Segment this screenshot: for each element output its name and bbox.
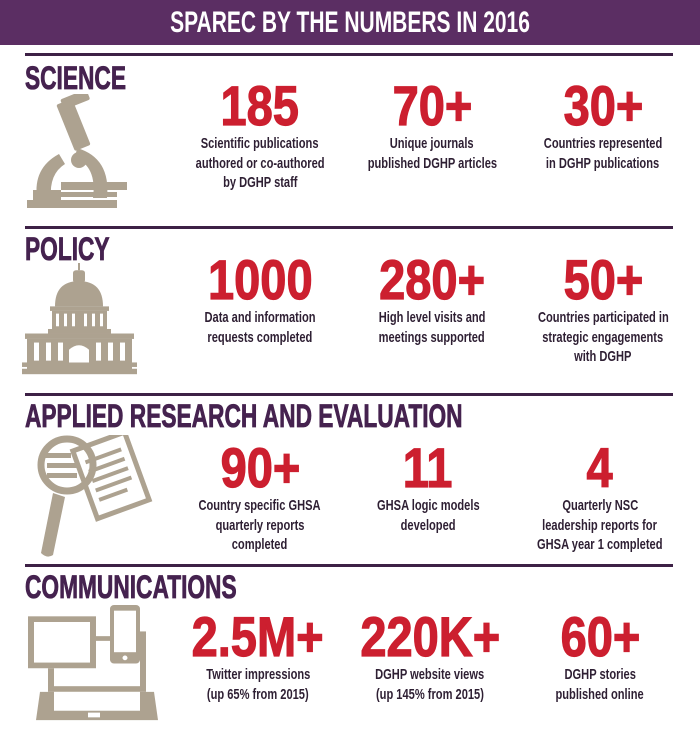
stat: 4: [537, 436, 663, 553]
stat: 11: [377, 436, 480, 534]
stat: 60+: DGHP stories: [564, 666, 636, 683]
heading: science: SCIENCE: [25, 60, 126, 96]
stat: 90+: completed: [232, 536, 288, 553]
stat: 1000: Data and information: [204, 309, 315, 326]
stat: 70+: [367, 74, 497, 172]
stat: 90+: [198, 436, 321, 553]
stat: 4: Quarterly NSC: [562, 497, 638, 514]
stat: 1000: requests completed: [208, 328, 312, 346]
stat: 280+: meetings supported: [379, 328, 485, 346]
icon: devices: [28, 605, 158, 720]
icon: magnifier with document: [38, 435, 152, 557]
stat: 220K+: (up 145% from 2015): [376, 686, 484, 702]
title: SPAREC BY THE NUMBERS IN 2016: [170, 6, 530, 39]
stat: 185: 185: [221, 74, 299, 137]
stat: 280+: High level visits and: [379, 309, 485, 326]
panel: policy: [22, 231, 668, 374]
stat: 90+: 90+: [220, 436, 300, 499]
stat: 70+: Unique journals: [390, 135, 474, 152]
stat: 1000: 1000: [208, 248, 312, 311]
stat: 4: GHSA year 1 completed: [537, 536, 663, 553]
stat: 1000: [204, 248, 315, 346]
stat: 50+: 50+: [563, 248, 643, 311]
stat: 11: 11: [403, 436, 453, 499]
title: [0, 0, 700, 45]
stat: 30+: in DGHP publications: [546, 154, 660, 172]
stat: 11: developed: [401, 516, 455, 534]
stat: 60+: 60+: [560, 605, 640, 668]
icon: microscope: [27, 94, 127, 208]
stat: 220K+: [360, 605, 500, 702]
stat: 50+: strategic engagements: [543, 328, 663, 346]
icon: capitol: [22, 263, 137, 374]
stat: 90+: Country specific GHSA: [199, 497, 321, 514]
heading: communications: COMMUNICATIONS: [25, 569, 237, 605]
stat: 50+: [538, 248, 668, 365]
stat: 30+: [544, 74, 662, 172]
stat: 185: [196, 74, 324, 191]
stat: 220K+: 220K+: [360, 605, 500, 668]
stat: 11: GHSA logic models: [377, 497, 479, 514]
stat: 280+: [379, 248, 485, 346]
heading: applied research: APPLIED RESEARCH AND EVALUATION: [25, 398, 463, 434]
panel: applied research: [25, 398, 663, 557]
stat: 60+: [556, 605, 644, 702]
stat: 70+: 70+: [392, 74, 472, 137]
stat: 30+: Countries represented: [544, 135, 662, 152]
heading: policy: POLICY: [25, 231, 110, 267]
stat: 185: Scientific publications: [201, 135, 319, 152]
stat: 2.5M+: 2.5M+: [192, 605, 324, 668]
stat: 90+: quarterly reports: [216, 516, 304, 534]
stat: 185: authored or co-authored: [196, 154, 324, 172]
stat: 220K+: DGHP website views: [375, 666, 484, 683]
stat: 185: by DGHP staff: [223, 174, 297, 191]
stat: 30+: 30+: [563, 74, 643, 137]
stat: 2.5M+: (up 65% from 2015): [207, 686, 309, 702]
stat: 50+: Countries participated in: [538, 309, 668, 326]
stat: 50+: with DGHP: [574, 348, 632, 365]
stat: 70+: published DGHP articles: [367, 154, 497, 172]
panel: science: [25, 60, 662, 208]
panel: communications: [25, 569, 644, 720]
stat: 280+: 280+: [379, 248, 485, 311]
stat: 2.5M+: Twitter impressions: [206, 666, 310, 683]
stat: 60+: published online: [556, 686, 644, 702]
stat: 4: 4: [587, 436, 613, 499]
stat: 4: leadership reports for: [543, 516, 657, 534]
stat: 2.5M+: [192, 605, 324, 702]
